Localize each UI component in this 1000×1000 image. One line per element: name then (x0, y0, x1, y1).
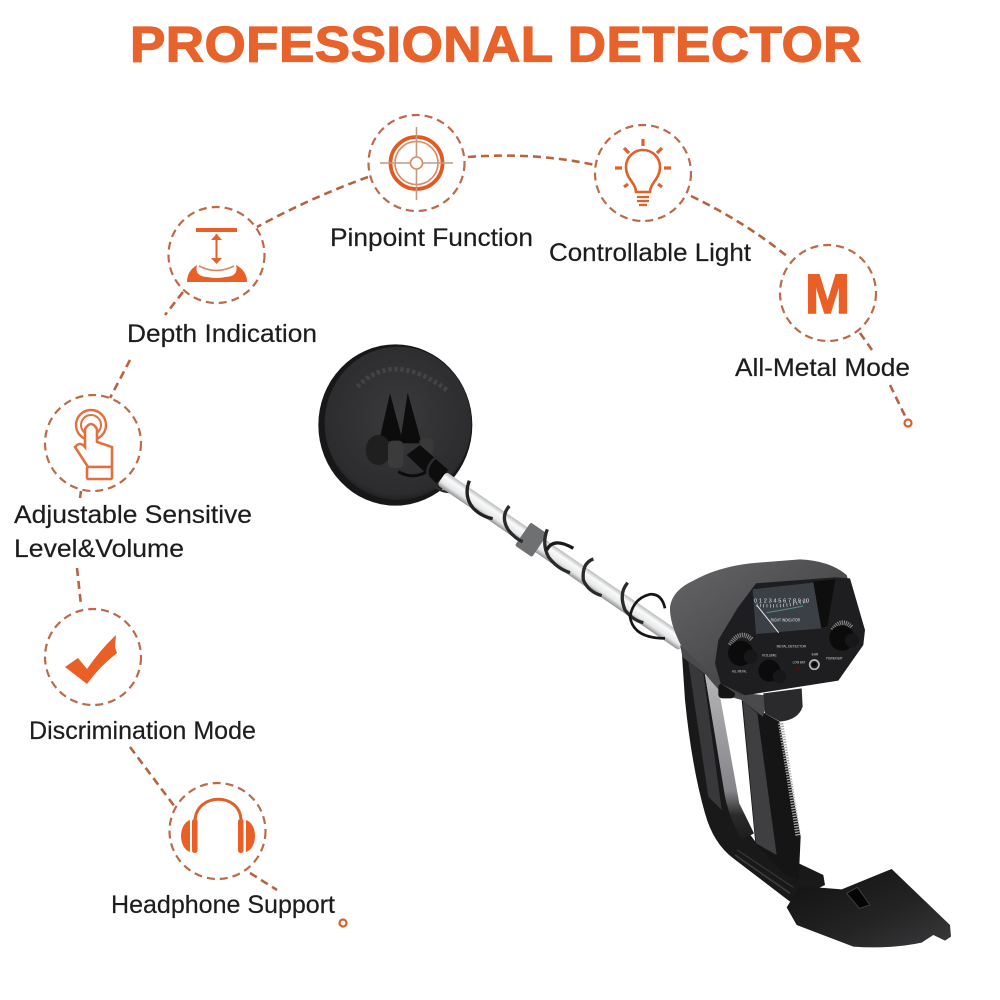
panel text: VOLUME (762, 654, 777, 658)
mount blob (718, 683, 735, 698)
label: Adjustable Sensitive (14, 501, 252, 529)
centre column (742, 700, 801, 880)
label: Pinpoint Function (330, 224, 533, 252)
analog meter: 0 1 2 3 4 5 6 7 8 9 10 (754, 599, 809, 605)
knob: left (728, 635, 758, 666)
silver inner strip (705, 675, 754, 840)
arm rest slot (847, 887, 870, 908)
label: All-Metal Mode (735, 354, 910, 382)
feature: controllable light (549, 125, 751, 267)
knob: volume (758, 660, 786, 683)
meter dark side (813, 579, 835, 628)
panel text: POWER BAT (826, 657, 843, 661)
panel text: LOW BAT (793, 660, 806, 664)
handle opening (723, 697, 755, 833)
shaft and coil section (318, 344, 692, 656)
icon: hand pressing button (75, 410, 112, 479)
label: Discrimination Mode (29, 717, 256, 745)
icon: crosshair target (380, 127, 453, 200)
icon: check mark (65, 635, 117, 684)
metal detector product (318, 344, 951, 947)
control box and handle (670, 559, 951, 947)
feature: headphone support (111, 783, 335, 919)
strap under console (680, 645, 767, 717)
feature: adjustable sensitive level and volume (14, 395, 252, 563)
icon: light bulb (615, 139, 671, 205)
earphone jack (810, 660, 819, 669)
icon: headphones (181, 799, 255, 853)
label: Controllable Light (549, 239, 751, 267)
coiled cable (467, 481, 493, 519)
knob: right (829, 623, 859, 651)
search coil (318, 344, 472, 506)
low battery led (795, 666, 800, 672)
arm rest (787, 869, 951, 947)
feature: depth indication (127, 207, 317, 348)
feature: all-metal mode (735, 245, 910, 382)
console face (715, 577, 865, 695)
dashed connector path (77, 156, 906, 890)
label line 2: Level&Volume (14, 535, 184, 563)
panel text: ALL METAL (732, 669, 747, 673)
feature: discrimination mode (29, 609, 256, 745)
label: Headphone Support (111, 891, 335, 919)
panel text: METAL DETECTOR (777, 644, 806, 648)
neck block (763, 688, 803, 722)
title: PROFESSIONAL DETECTOR (130, 16, 861, 72)
analog meter: RIGHT INDICATOR (771, 617, 800, 622)
label: Depth Indication (127, 320, 317, 348)
end dot: bottom (340, 920, 346, 926)
panel text (732, 644, 843, 673)
end dot: right (904, 420, 912, 426)
analog meter (753, 583, 821, 634)
telescopic shaft (434, 467, 692, 656)
icon: letter M: M (805, 262, 850, 325)
panel text: EAR (812, 652, 819, 656)
feature: pinpoint function (330, 115, 533, 252)
handle frame (682, 650, 825, 902)
console body (670, 559, 863, 697)
icon: depth arrow (187, 228, 247, 282)
